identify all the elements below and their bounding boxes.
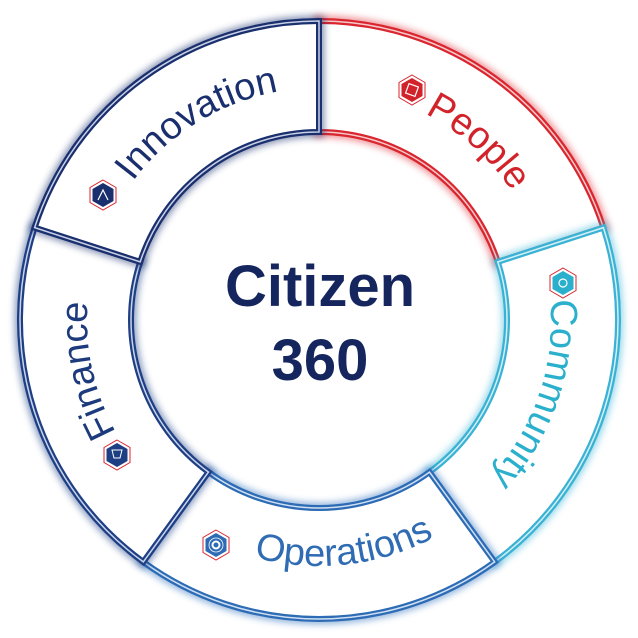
panel: people xyxy=(319,21,603,262)
label: people: People xyxy=(428,92,525,188)
label: finance: Finance xyxy=(66,303,114,441)
label: community: Community xyxy=(492,301,578,490)
title: Citizen 360: Citizen xyxy=(225,254,415,319)
panel: finance xyxy=(20,228,209,562)
panel: operations xyxy=(143,472,495,619)
icon: community xyxy=(550,268,576,298)
label: operations: Operations xyxy=(258,522,432,572)
title: Citizen 360 xyxy=(225,254,415,393)
label: innovation: Innovation xyxy=(114,73,276,179)
panel: community xyxy=(430,228,618,562)
panel: innovation xyxy=(35,21,319,262)
icon: operations xyxy=(203,530,229,560)
title: Citizen 360: 360 xyxy=(272,328,368,393)
icon: people xyxy=(399,75,425,105)
icon: innovation xyxy=(90,180,116,210)
icon: finance xyxy=(104,440,130,470)
